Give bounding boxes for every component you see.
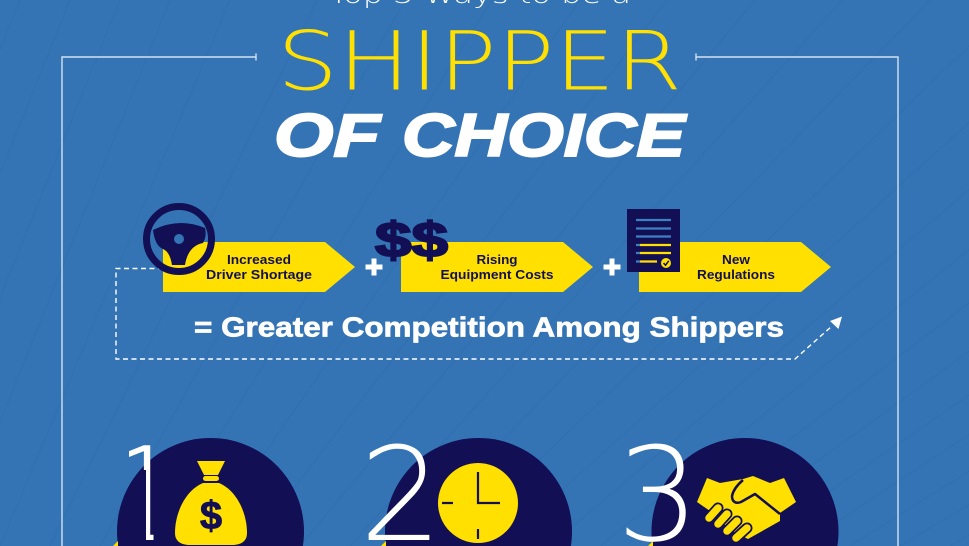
content frame [62,54,898,546]
title: SHIPPER: SHIPPER [277,16,682,110]
plus sign 2 [604,258,620,276]
icon: dollar signs: $$ [375,214,448,268]
heading: greater competition: = Greater Competition Among Shippers [194,312,784,342]
icon: money bag [175,461,247,545]
icon: handshake [697,476,796,539]
panel: equipment costs arrow: Equipment Costs [440,268,554,282]
panel: driver shortage arrow [163,242,355,292]
panel: way 3 partnership [652,438,838,546]
yellow banner tips [113,541,653,546]
title: OF CHOICE: CHOICE [402,102,687,169]
panel: equipment costs arrow: Rising [476,253,518,267]
title: OF CHOICE [274,102,687,169]
panel: equipment costs arrow [401,242,593,292]
icon: checklist document [627,209,680,272]
plus sign 1 [366,258,382,276]
panel: driver shortage arrow: Driver Shortage [206,268,312,282]
panel: way 2 time [385,438,572,546]
panel: new regulations arrow [639,242,831,292]
dashed loop arrow [116,268,842,359]
icon: clock [438,463,518,543]
title: OF CHOICE: OF [274,102,382,169]
panel: new regulations arrow: New [722,253,750,267]
panel: new regulations arrow: Regulations [697,268,775,282]
panel: driver shortage arrow: Increased [227,253,291,267]
panel: way 1 money [117,438,304,546]
icon: steering wheel [146,206,212,272]
icon: money bag: $ [200,494,222,538]
